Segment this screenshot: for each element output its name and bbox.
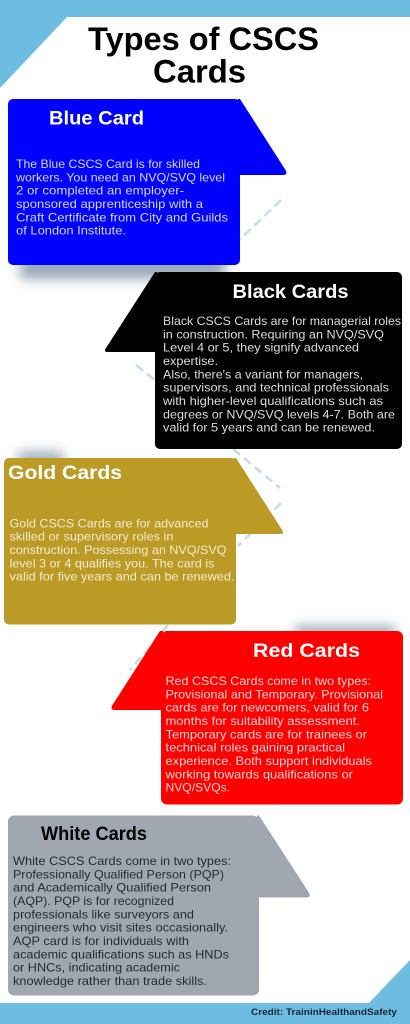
- text: black card description: supervisors, and technical professionals: [163, 381, 389, 395]
- text: black card description: Level 4 or 5, they signify advanced: [163, 341, 359, 355]
- text: gold card description: valid for five years and can be renewed.: [10, 570, 234, 584]
- bottom banner: [0, 960, 410, 1024]
- text: gold card description: Gold CSCS Cards are for advanced: [10, 516, 208, 530]
- text: white card description: Professionally Qualified Person (PQP): [13, 867, 224, 881]
- text: red card description: experience. Both support individuals: [166, 754, 372, 768]
- text: red card description: working towards qualifications or: [164, 767, 353, 781]
- heading: white cards: White Cards: [41, 824, 147, 845]
- text: white card description: or HNCs, indicating academic: [13, 961, 180, 975]
- text: blue card description: 2 or completed an employer-: [16, 184, 184, 198]
- text: black card description: Also, there's a variant for managers,: [163, 367, 363, 381]
- heading: red cards: Red Cards: [253, 641, 360, 662]
- title: Cards: [153, 54, 246, 90]
- text: white card description: professionals like surveyors and: [13, 907, 194, 921]
- text: white card description: and Academically Qualified Person: [13, 881, 211, 895]
- panel: red card: [111, 631, 403, 804]
- heading: black cards: Black Cards: [232, 282, 348, 303]
- text: white card description: knowledge rather than trade skills.: [13, 974, 207, 988]
- text: black card description: Black CSCS Cards are for managerial roles: [163, 314, 401, 328]
- text: red card description: technical roles gaining practical: [166, 741, 345, 755]
- text: blue card description: Craft Certificate from City and Guilds: [16, 210, 228, 224]
- text: white card description: engineers who visit sites occasionally.: [13, 921, 228, 935]
- text: blue card description: The Blue CSCS Card is for skilled: [16, 157, 200, 171]
- credit: Credit: TraininHealthandSafety: [251, 1007, 398, 1018]
- text: black card description: valid for 5 years and can be renewed.: [163, 421, 375, 435]
- panel: blue card: [8, 99, 286, 265]
- text: red card description: Provisional and Temporary. Provisional: [166, 687, 383, 701]
- text: gold card description: construction. Possessing an NVQ/SVQ: [10, 543, 226, 557]
- text: red card description: NVQ/SVQs.: [166, 781, 230, 795]
- text: red card description: Red CSCS Cards come in two types:: [166, 674, 371, 688]
- text: black card description: in construction. Requiring an NVQ/SVQ: [163, 327, 384, 341]
- text: white card description: White CSCS Cards come in two types:: [13, 854, 231, 868]
- text: black card description: expertise.: [163, 354, 218, 368]
- title: [88, 21, 319, 90]
- text: white card description: academic qualifications such as HNDs: [13, 947, 229, 961]
- text: black card description: [162, 314, 401, 435]
- text: gold card description: skilled or supervisory roles in: [10, 530, 174, 544]
- text: gold card description: level 3 or 4 qualifies you. The card is: [10, 556, 214, 570]
- text: red card description: cards are for newcomers, valid for 6: [166, 701, 369, 715]
- text: blue card description: of London Institute.: [16, 224, 126, 238]
- text: white card description: [13, 854, 231, 988]
- heading: blue card: Blue Card: [49, 108, 144, 130]
- text: blue card description: [15, 157, 228, 238]
- heading: gold cards: Gold Cards: [8, 463, 122, 484]
- text: red card description: [164, 674, 383, 795]
- text: white card description: AQP card is for individuals with: [13, 934, 189, 948]
- top banner: [0, 0, 410, 88]
- text: red card description: Temporary cards are for trainees or: [166, 727, 367, 741]
- panel: gold card: [4, 458, 283, 624]
- text: blue card description: sponsored apprenticeship with a: [16, 197, 203, 211]
- text: blue card description: workers. You need an NVQ/SVQ level: [15, 170, 225, 184]
- text: black card description: with higher-level qualifications such as: [162, 394, 383, 408]
- text: black card description: degrees or NVQ/SVQ levels 4-7. Both are: [163, 407, 395, 421]
- text: gold card description: [10, 516, 234, 584]
- text: red card description: months for suitability assessment.: [166, 714, 360, 728]
- panel: white card: [8, 816, 310, 996]
- title: Types of CSCS: [88, 21, 319, 57]
- text: white card description: (AQP). PQP is for recognized: [13, 894, 174, 908]
- panel: black card: [105, 272, 402, 449]
